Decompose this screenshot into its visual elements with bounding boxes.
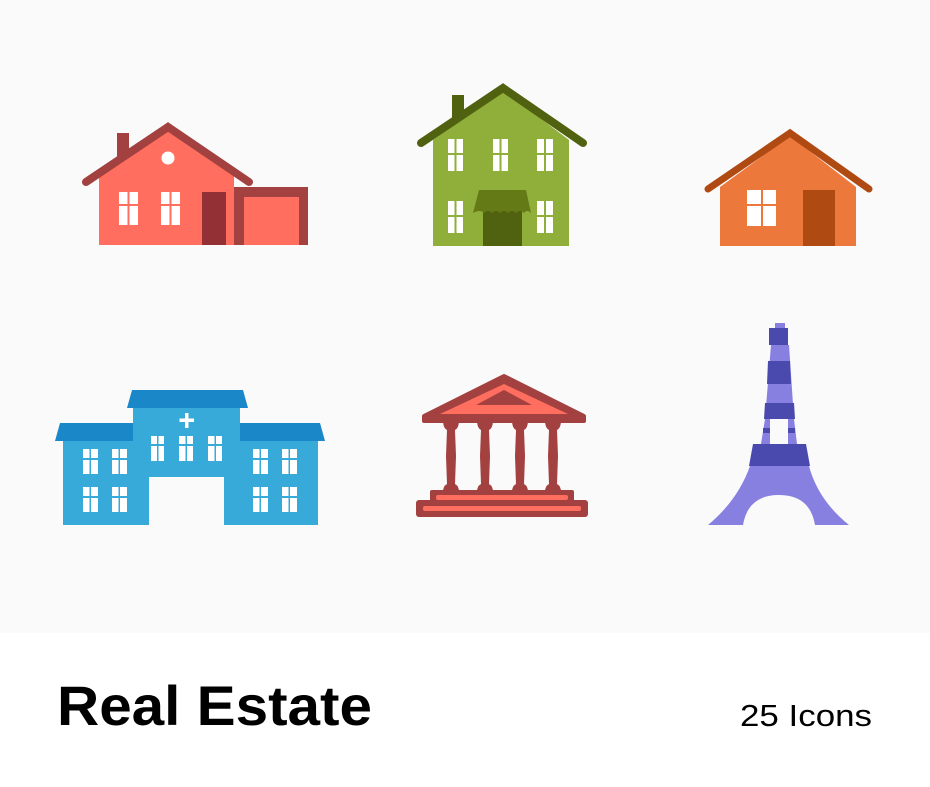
icon: hospital: [55, 390, 325, 525]
icon: red house with garage: [86, 127, 308, 245]
icon: classical temple: [416, 376, 588, 517]
footer: icon count: 25 Icons: [740, 698, 872, 733]
icon: orange house: [708, 133, 869, 246]
icon: eiffel tower: [708, 323, 849, 525]
icon: green townhouse: [421, 88, 583, 246]
footer: title: Real Estate: [57, 674, 372, 737]
